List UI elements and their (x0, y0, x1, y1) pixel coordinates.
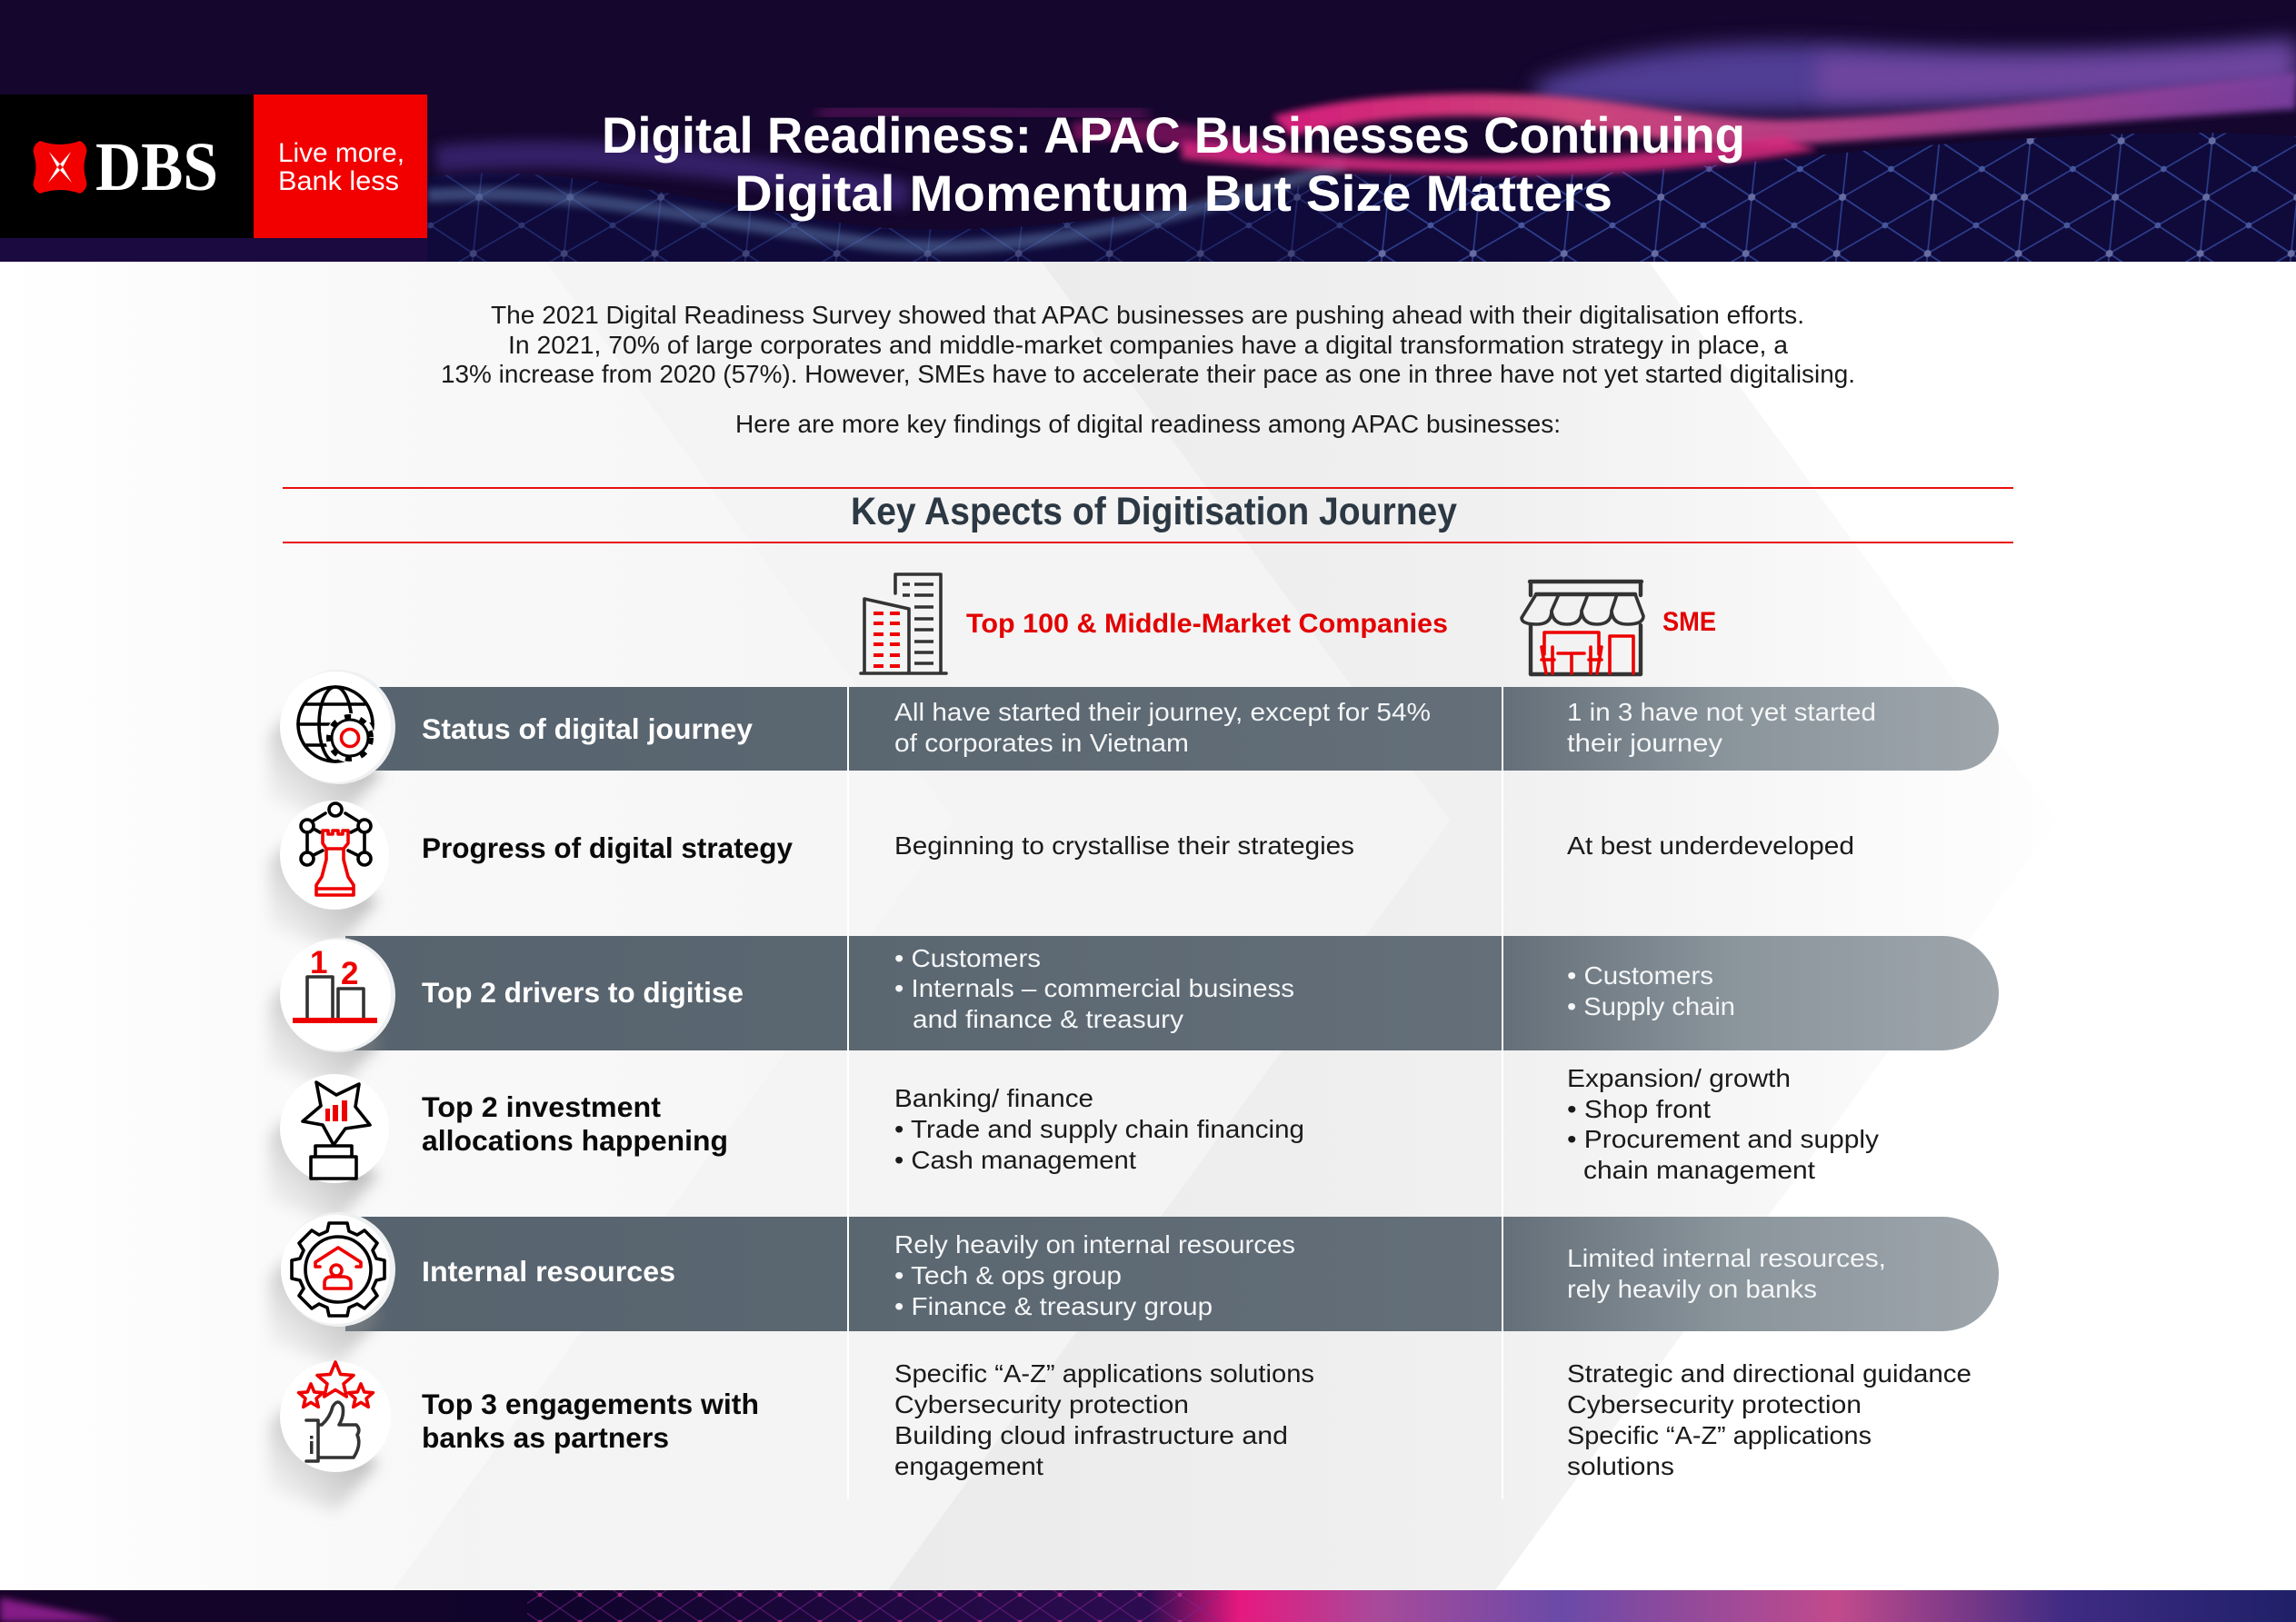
intro text: Here are more key findings of digital readiness among APAC businesses: (735, 410, 1561, 438)
tagline (278, 138, 404, 196)
row 4: top 2 investment allocations: Banking/ finance (894, 1084, 1093, 1112)
row 2: progress of digital strategy: At best underdeveloped (1567, 831, 1854, 860)
icon: chess rook network (269, 801, 389, 950)
row 5: internal resources: • Finance & treasury group (894, 1292, 1213, 1320)
icon: podium 1 2 (269, 938, 395, 1090)
DBS wordmark: DBS (95, 129, 218, 205)
row 6: top 3 engagements: Building cloud infrastructure and (894, 1421, 1288, 1449)
row 5: internal resources: Internal resources (422, 1255, 675, 1288)
row 6: top 3 engagements: solutions (1567, 1452, 1674, 1480)
row 1: status of digital journey: their journey (1567, 729, 1722, 757)
row 3: top 2 drivers: • Supply chain (1567, 992, 1735, 1020)
row 6: top 3 engagements: engagement (894, 1452, 1043, 1480)
row 1: status of digital journey (269, 670, 1876, 822)
title: Digital Readiness: APAC Businesses Continuing (602, 106, 1745, 164)
row 4: top 2 investment allocations: allocations happening (422, 1124, 728, 1157)
icon: gear with house and person (269, 1212, 395, 1365)
row 4: top 2 investment allocations (269, 1064, 1879, 1224)
icon: podium 1 2: 2 (341, 956, 358, 991)
row 6: top 3 engagements: Specific “A-Z” applications solutions (894, 1359, 1314, 1388)
icon: DBS mark (34, 141, 86, 194)
row 6: top 3 engagements: Cybersecurity protection (894, 1390, 1189, 1418)
row 6: top 3 engagements: banks as partners (422, 1421, 669, 1454)
row 3: top 2 drivers (269, 938, 1735, 1090)
row 1: status of digital journey: 1 in 3 have not yet started (1567, 698, 1876, 726)
row 6: top 3 engagements: Strategic and directional guidance (1567, 1359, 1972, 1388)
icon: office buildings (861, 574, 946, 673)
row 4: top 2 investment allocations: chain management (1583, 1156, 1815, 1184)
row 4: top 2 investment allocations: Expansion/ growth (1567, 1064, 1791, 1092)
column header: SME (1522, 582, 1716, 674)
row 6: top 3 engagements: Cybersecurity protection (1567, 1390, 1862, 1418)
row 3: top 2 drivers: Top 2 drivers to digitise (422, 976, 744, 1009)
intro text: 13% increase from 2020 (57%). However, SMEs have to accelerate their pace as one in three have not yet started digitalising. (441, 360, 1855, 388)
tagline: Live more, (278, 138, 404, 168)
row band: internal resources (345, 1217, 1999, 1331)
intro text: The 2021 Digital Readiness Survey showed that APAC businesses are pushing ahead with their digitalisation efforts. (491, 301, 1804, 329)
header banner (0, 0, 2296, 262)
row 3: top 2 drivers: and finance & treasury (913, 1005, 1183, 1033)
intro text (441, 301, 1855, 438)
row 1: status of digital journey: All have started their journey, except for 54% (894, 698, 1431, 726)
intro text: In 2021, 70% of large corporates and middle-market companies have a digital transformation strategy in place, a (508, 331, 1788, 359)
row 2: progress of digital strategy: Progress of digital strategy (422, 831, 793, 864)
row 4: top 2 investment allocations: • Shop front (1567, 1095, 1711, 1123)
row 4: top 2 investment allocations: • Cash management (894, 1146, 1136, 1174)
row 6: top 3 engagements: Top 3 engagements with (422, 1388, 759, 1420)
icon: storefront (1522, 582, 1643, 674)
row 4: top 2 investment allocations: • Procurement and supply (1567, 1125, 1879, 1153)
row 5: internal resources: Rely heavily on internal resources (894, 1230, 1295, 1259)
row 2: progress of digital strategy: Beginning to crystallise their strategies (894, 831, 1354, 860)
icon: thumbs up with stars (269, 1361, 391, 1512)
row band: status (345, 687, 1999, 771)
row 4: top 2 investment allocations: • Trade and supply chain financing (894, 1115, 1304, 1143)
row 5: internal resources: rely heavily on banks (1567, 1275, 1817, 1303)
row 1: status of digital journey: Status of digital journey (422, 712, 753, 745)
title (602, 106, 1745, 222)
icon: star trophy (269, 1074, 389, 1224)
row 1: status of digital journey: of corporates in Vietnam (894, 729, 1189, 757)
row 5: internal resources: • Tech & ops group (894, 1261, 1122, 1289)
section heading: Key Aspects of Digitisation Journey (851, 490, 1457, 533)
row 4: top 2 investment allocations: Top 2 investment (422, 1090, 662, 1123)
row 3: top 2 drivers: • Customers (894, 944, 1041, 972)
row 5: internal resources: Limited internal resources, (1567, 1244, 1886, 1272)
row 3: top 2 drivers: • Customers (1567, 961, 1713, 990)
logo block (0, 95, 427, 238)
tagline: Bank less (278, 166, 399, 196)
icon: globe with gear (269, 670, 395, 822)
column header: Top 100 & Middle-Market Companies (861, 574, 1448, 673)
row 6: top 3 engagements (269, 1359, 1972, 1512)
column dividers (848, 687, 1502, 1499)
title: Digital Momentum But Size Matters (734, 164, 1612, 222)
footer banner (0, 1590, 2296, 1622)
row 2: progress of digital strategy (269, 801, 1854, 950)
icon: podium 1 2: 1 (310, 945, 327, 980)
row band: drivers (345, 936, 1999, 1050)
row 6: top 3 engagements: Specific “A-Z” applications (1567, 1421, 1872, 1449)
column header: Top 100 & Middle-Market Companies: Top 100 & Middle-Market Companies (966, 609, 1448, 639)
row 3: top 2 drivers: • Internals – commercial business (894, 974, 1294, 1002)
row 5: internal resources (269, 1212, 1886, 1365)
column header: SME: SME (1662, 607, 1716, 637)
